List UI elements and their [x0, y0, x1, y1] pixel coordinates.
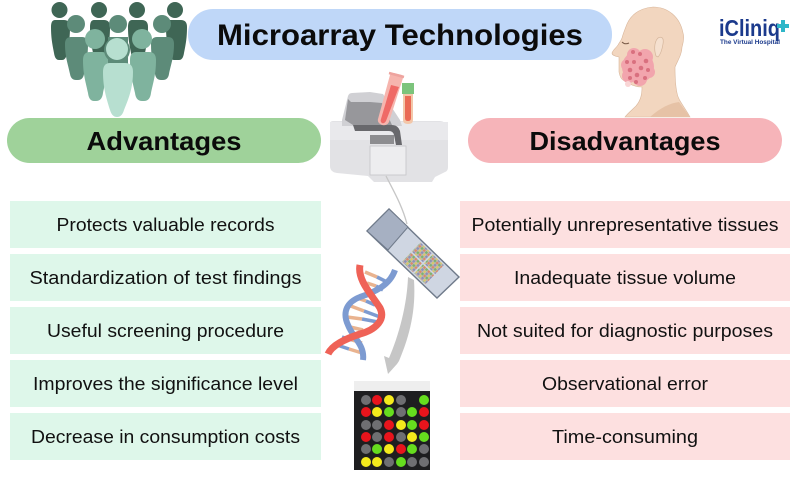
item: unrepresentative tissues	[460, 201, 790, 248]
item: protects valuable records: Protects valuable records	[56, 215, 274, 235]
item: observational error	[460, 360, 790, 407]
logo: iCliniq: iCliniq	[719, 15, 780, 41]
item: consumption costs	[10, 413, 321, 460]
heading: disadvantages: Disadvantages	[530, 126, 720, 156]
item: significance: Improves the significance level	[33, 374, 298, 394]
heading: advantages	[7, 118, 321, 163]
item: diagnostic purposes	[460, 307, 790, 354]
item: unrepresentative tissues: Potentially unrepresentative tissues	[472, 215, 778, 235]
item: significance	[10, 360, 321, 407]
item: time-consuming: Time-consuming	[552, 427, 698, 447]
icon: microarray machine	[330, 73, 448, 182]
item: diagnostic purposes: Not suited for diagnostic purposes	[477, 321, 773, 341]
arrow: grey curved arrow to result grid	[384, 277, 414, 374]
item: observational error: Observational error	[542, 374, 708, 394]
item: screening	[10, 307, 321, 354]
title	[188, 9, 612, 60]
heading: advantages: Advantages	[86, 126, 242, 156]
icon: face with rash	[612, 7, 690, 117]
title: Microarray Technologies	[217, 19, 583, 52]
icon: DNA helix	[328, 265, 395, 360]
icon: microarray slide	[367, 209, 459, 298]
item: protects valuable records	[10, 201, 321, 248]
heading: disadvantages	[468, 118, 782, 163]
icon: group of people	[51, 2, 187, 117]
panel: advantages list	[10, 201, 321, 460]
panel: disadvantages list	[460, 201, 790, 460]
arrow: connector line from machine to slide	[386, 176, 407, 224]
icon: microarray result grid	[354, 381, 430, 470]
item: standardization	[10, 254, 321, 301]
logo: iCliniq: The Virtual Hospital	[720, 40, 780, 46]
item: screening: Useful screening procedure	[47, 321, 284, 341]
item: standardization: Standardization of test findings	[30, 268, 302, 288]
item: tissue volume: Inadequate tissue volume	[514, 268, 736, 288]
item: consumption costs: Decrease in consumption costs	[31, 427, 300, 447]
item: time-consuming	[460, 413, 790, 460]
item: tissue volume	[460, 254, 790, 301]
